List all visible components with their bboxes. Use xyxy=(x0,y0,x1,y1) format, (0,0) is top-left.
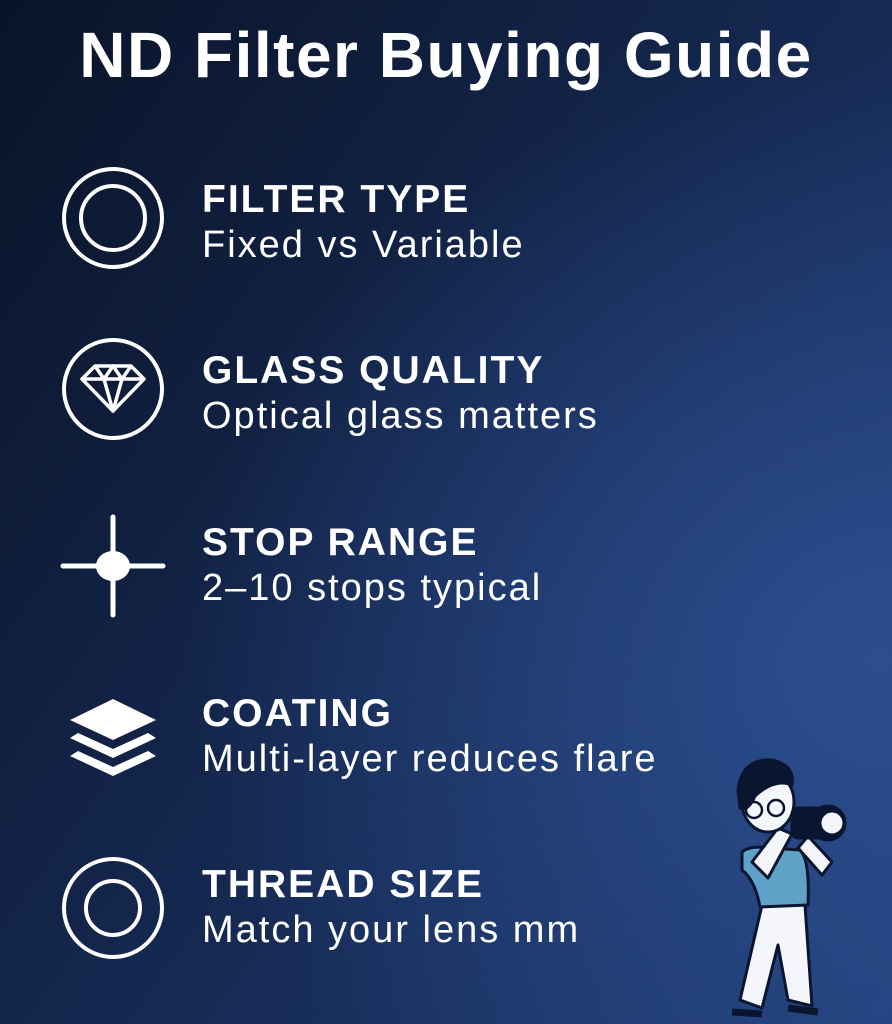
text: filter type xyxy=(202,178,525,266)
text: coating: COATING xyxy=(202,692,393,735)
text: coating xyxy=(202,692,657,780)
text: thread size: Match your lens mm xyxy=(202,909,580,951)
text: glass quality xyxy=(202,349,599,437)
text: stop range xyxy=(202,521,542,609)
text: filter type: FILTER TYPE xyxy=(202,178,470,221)
text: coating: Multi-layer reduces flare xyxy=(202,738,657,780)
text: filter type: Fixed vs Variable xyxy=(202,224,525,266)
icon: diamond xyxy=(62,338,164,440)
text: thread size xyxy=(202,863,580,951)
icon: crosshair xyxy=(60,514,166,618)
icon: thread ring xyxy=(62,857,164,959)
text: stop range: STOP RANGE xyxy=(202,521,478,564)
text: glass quality: Optical glass matters xyxy=(202,395,599,437)
title: ND Filter Buying Guide xyxy=(79,19,813,91)
illustration: photographer xyxy=(732,758,846,1018)
text: stop range: 2–10 stops typical xyxy=(202,567,542,609)
text: glass quality: GLASS QUALITY xyxy=(202,349,544,392)
icon: layers xyxy=(70,699,156,776)
icon: filter ring xyxy=(62,167,164,269)
text: thread size: THREAD SIZE xyxy=(202,863,484,906)
